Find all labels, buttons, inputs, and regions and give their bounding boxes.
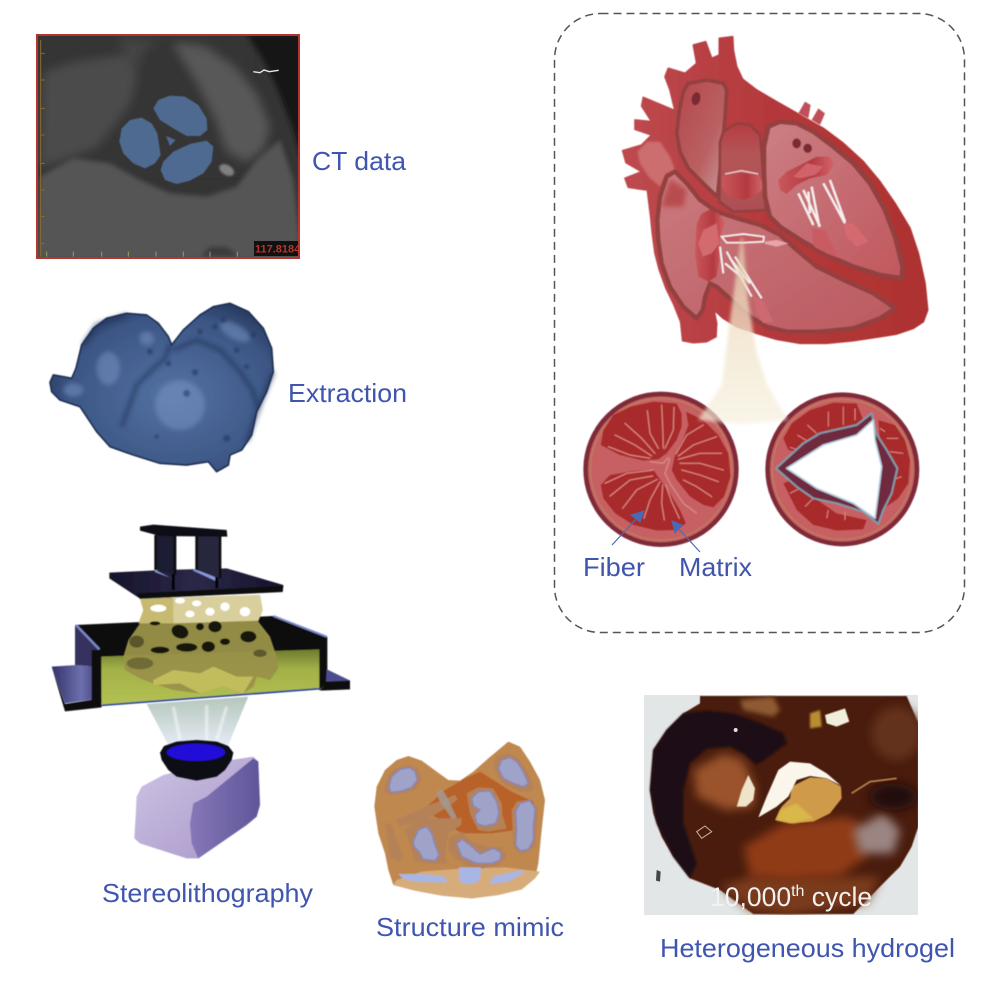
upper right chamber — [764, 122, 903, 278]
tricuspid leaflets — [722, 234, 764, 243]
vena cava stub — [637, 142, 675, 187]
lower chamber — [657, 172, 895, 332]
yellow lattice scaffold — [123, 595, 278, 693]
callout: zoom beam from heart to valve — [698, 238, 788, 424]
label: Stereolithography: Stereolithography — [102, 878, 313, 908]
top frame with pillars — [155, 535, 176, 575]
CT tissue — [37, 35, 270, 170]
blue valve sinuses — [119, 96, 213, 184]
heart body — [623, 37, 928, 343]
blue bottom channels — [398, 867, 524, 884]
chordae lower — [720, 247, 762, 298]
photo caption: 10,000 — [710, 882, 791, 912]
chordae upper — [798, 180, 845, 227]
build tray with resin — [52, 616, 350, 711]
leaflets behind — [783, 403, 863, 453]
label: Extraction: Extraction — [288, 378, 407, 408]
label: Structure mimic: Structure mimic — [376, 912, 564, 942]
light box base — [134, 757, 260, 858]
central aorta — [719, 123, 766, 212]
mitral valve flaps — [778, 157, 834, 194]
leaflets — [601, 402, 682, 461]
panel: closed valve disc — [586, 394, 736, 545]
blue pores — [389, 757, 535, 863]
panel: open valve disc — [768, 395, 917, 544]
photo: heterogeneous hydrogel valve at 10,000th cycle — [644, 695, 922, 915]
grey strut — [436, 789, 457, 819]
scale ticks — [41, 40, 45, 257]
callout: Fiber arrow — [612, 511, 644, 545]
label: Heterogeneous hydrogel: Heterogeneous hydrogel — [660, 933, 955, 963]
dark valve photo — [650, 696, 922, 915]
label: Matrix: Matrix — [679, 552, 752, 582]
label: CT data: CT data — [312, 146, 407, 176]
halos — [384, 753, 538, 870]
illustration: stereolithography printer — [52, 525, 350, 858]
aortic valve cusps — [722, 173, 763, 200]
tricuspid pad — [695, 209, 725, 282]
valve opening highlight — [697, 728, 897, 838]
photo caption: cycle — [804, 882, 872, 912]
CT measurement readout: 117.8184 — [255, 244, 301, 256]
label: Fiber: Fiber — [583, 552, 645, 582]
panel: CT data image — [37, 33, 303, 260]
blue lamp bowl — [160, 740, 233, 781]
upper platform — [109, 525, 283, 599]
fibers — [605, 405, 723, 520]
lower light band — [393, 867, 540, 898]
open orifice — [776, 413, 897, 524]
panel: dashed frame — [554, 14, 964, 632]
upper atrium — [677, 80, 727, 197]
illustration: structure mimic — [374, 742, 545, 898]
fibers — [790, 407, 903, 520]
darker fiber region — [423, 772, 535, 833]
illustration: heart cross-section — [623, 37, 928, 343]
light cone — [147, 697, 248, 745]
outer leaflet body — [374, 742, 545, 898]
icon: extracted valve model — [50, 303, 273, 472]
callout: Matrix arrow — [672, 521, 700, 552]
photo caption: th — [791, 883, 804, 900]
pulmonary stubs — [798, 102, 825, 125]
